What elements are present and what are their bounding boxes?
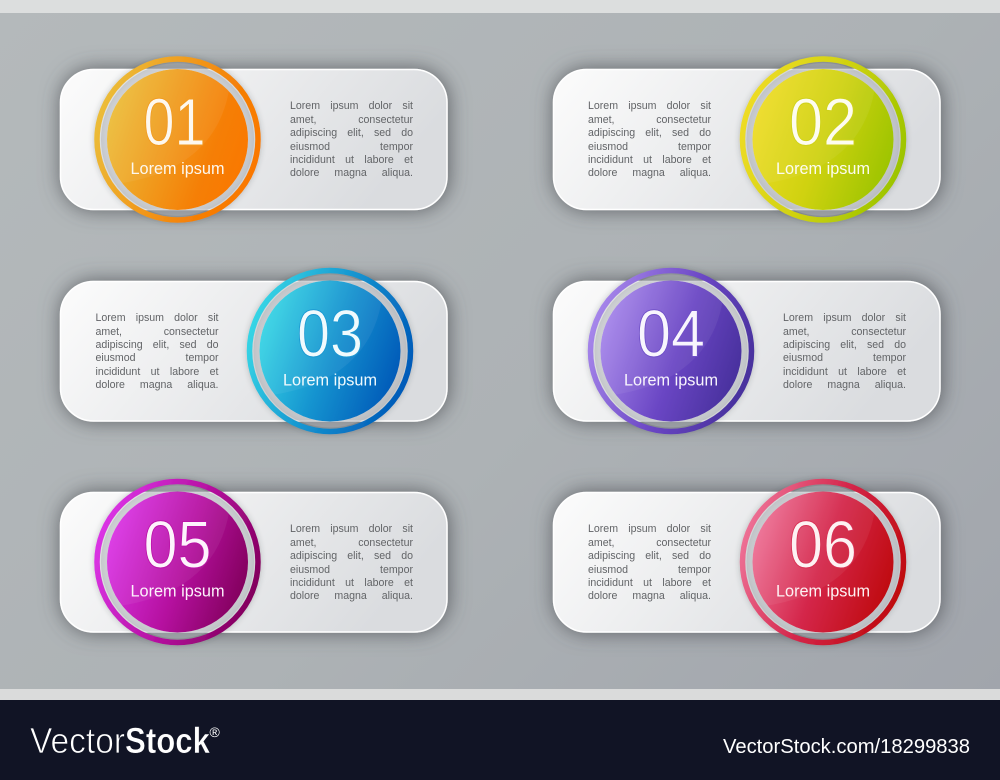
text block 05 bbox=[290, 523, 413, 602]
panel: 01 bbox=[48, 52, 462, 226]
text block 06: Lorem ipsum dolor sit bbox=[588, 523, 711, 535]
image id url: VectorStock.com/18299838 bbox=[723, 736, 970, 758]
badge 04 bbox=[590, 270, 752, 432]
text block 04: Lorem ipsum dolor sit bbox=[783, 312, 906, 324]
text block 02: amet, consectetur bbox=[588, 114, 711, 126]
card 02 bbox=[554, 70, 940, 210]
text block 03 bbox=[96, 312, 218, 391]
text block 03: amet, consectetur bbox=[96, 326, 218, 338]
badge 06: 06 bbox=[789, 508, 857, 582]
text block 04: incididunt ut labore et bbox=[783, 366, 906, 378]
badge 03: Lorem ipsum bbox=[283, 370, 377, 390]
text block 03: dolore magna aliqua. bbox=[96, 379, 218, 391]
text block 06: dolore magna aliqua. bbox=[588, 590, 711, 602]
text block 06: incididunt ut labore et bbox=[588, 577, 711, 589]
text block 01: Lorem ipsum dolor sit bbox=[290, 100, 413, 112]
logo: VectorStock: ® bbox=[210, 724, 220, 740]
text block 04: eiusmod tempor bbox=[783, 352, 906, 364]
text block 01: adipiscing elit, sed do bbox=[290, 127, 413, 139]
text block 06: adipiscing elit, sed do bbox=[588, 550, 711, 562]
card 06 bbox=[554, 492, 940, 632]
text block 01: amet, consectetur bbox=[290, 114, 413, 126]
text block 02: incididunt ut labore et bbox=[588, 154, 711, 166]
text block 01: incididunt ut labore et bbox=[290, 154, 413, 166]
panel: 05 bbox=[48, 475, 462, 649]
text block 03: incididunt ut labore et bbox=[96, 366, 218, 378]
logo: VectorStock bbox=[30, 720, 220, 761]
card 01 bbox=[60, 70, 447, 210]
text block 01 bbox=[290, 100, 413, 179]
card 05 bbox=[60, 492, 447, 632]
panel: 02 bbox=[540, 52, 954, 226]
badge 04: Lorem ipsum bbox=[624, 370, 718, 390]
badge 03 bbox=[250, 270, 410, 432]
text block 03: eiusmod tempor bbox=[96, 352, 218, 364]
text block 06: eiusmod tempor bbox=[588, 564, 711, 576]
text block 02: eiusmod tempor bbox=[588, 141, 711, 153]
text block 05: incididunt ut labore et bbox=[290, 577, 413, 589]
text block 01: eiusmod tempor bbox=[290, 141, 413, 153]
text block 06 bbox=[588, 523, 711, 602]
logo: VectorStock: Stock bbox=[125, 720, 211, 761]
badge 06 bbox=[742, 482, 904, 642]
badge 01: 01 bbox=[144, 85, 206, 160]
text block 02: Lorem ipsum dolor sit bbox=[588, 100, 711, 112]
card 03 bbox=[60, 282, 447, 421]
text block 05: eiusmod tempor bbox=[290, 564, 413, 576]
text block 03: adipiscing elit, sed do bbox=[96, 339, 218, 351]
text block 05: amet, consectetur bbox=[290, 537, 413, 549]
text block 06: amet, consectetur bbox=[588, 537, 711, 549]
badge 04: 04 bbox=[637, 296, 705, 372]
badge 02 bbox=[742, 59, 904, 220]
text block 04 bbox=[783, 312, 906, 391]
badge 01 bbox=[97, 59, 258, 220]
text block 04: amet, consectetur bbox=[783, 326, 906, 338]
badge 06: Lorem ipsum bbox=[776, 582, 870, 600]
panel: 06 bbox=[541, 476, 954, 648]
badge 01: Lorem ipsum bbox=[130, 159, 224, 178]
badge 02: 02 bbox=[789, 85, 857, 160]
panel: 03 bbox=[48, 264, 462, 438]
logo: VectorStock: Vector bbox=[30, 720, 125, 761]
badge 05 bbox=[97, 482, 258, 642]
text block 05: dolore magna aliqua. bbox=[290, 590, 413, 602]
text block 03: Lorem ipsum dolor sit bbox=[96, 312, 218, 324]
text block 02 bbox=[588, 100, 711, 179]
text block 02: adipiscing elit, sed do bbox=[588, 127, 711, 139]
text block 05: Lorem ipsum dolor sit bbox=[290, 523, 413, 535]
badge 02: Lorem ipsum bbox=[776, 159, 870, 178]
text block 04: dolore magna aliqua. bbox=[783, 379, 906, 391]
text block 04: adipiscing elit, sed do bbox=[783, 339, 906, 351]
light strip bbox=[0, 689, 1000, 700]
text block 01: dolore magna aliqua. bbox=[290, 167, 413, 179]
text block 02: dolore magna aliqua. bbox=[588, 167, 711, 179]
card 04 bbox=[554, 282, 940, 421]
badge 05: 05 bbox=[144, 508, 212, 582]
badge 05: Lorem ipsum bbox=[130, 582, 224, 600]
text block 05: adipiscing elit, sed do bbox=[290, 550, 413, 562]
badge 03: 03 bbox=[297, 296, 363, 372]
panel: 04 bbox=[540, 264, 954, 438]
footer bar bbox=[0, 700, 1000, 780]
